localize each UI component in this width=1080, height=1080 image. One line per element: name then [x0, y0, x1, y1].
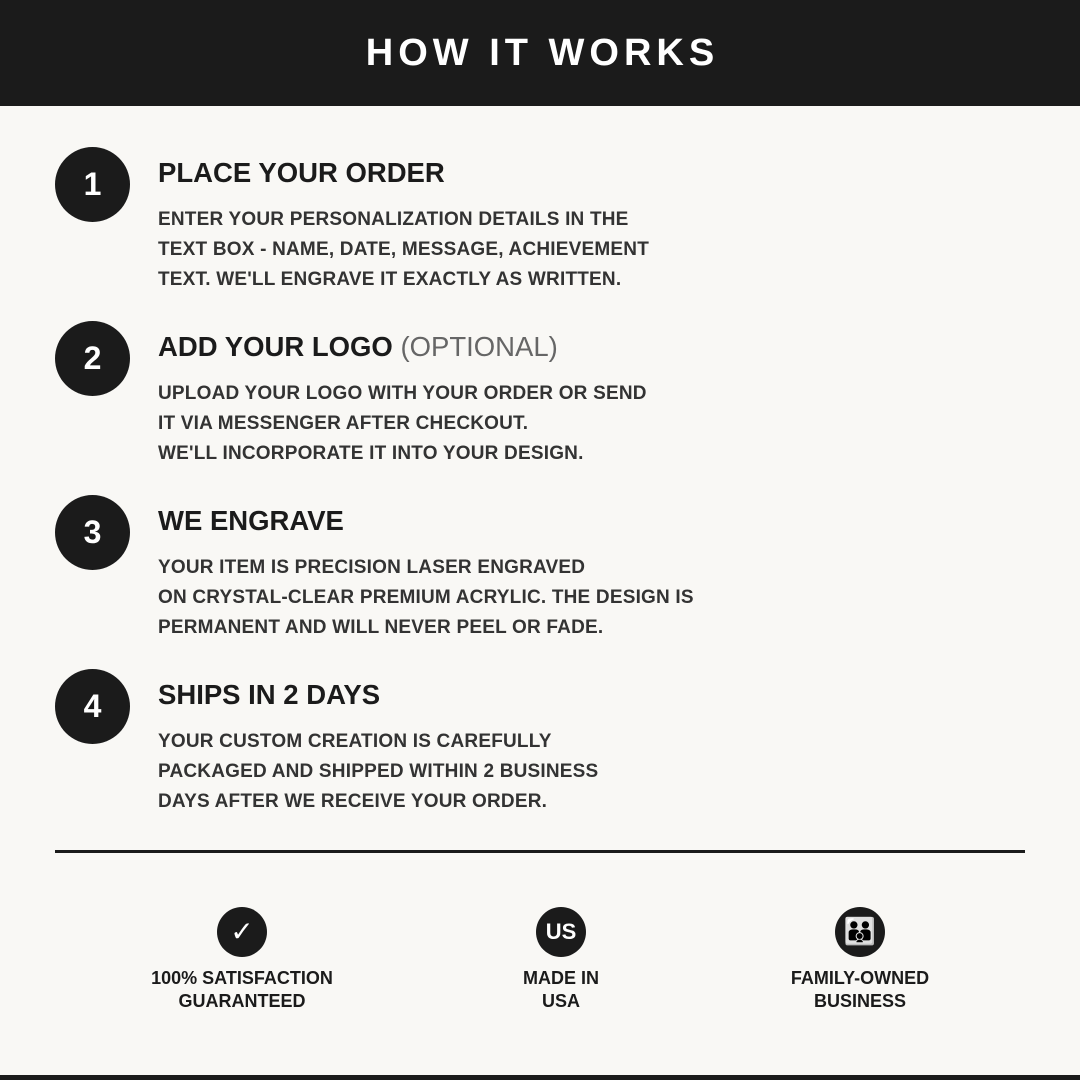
step 1 [55, 147, 649, 290]
title [0, 0, 1080, 106]
text: step 4 body [158, 731, 598, 812]
icon: number 1: 1 [84, 166, 101, 202]
text: step 1 body [158, 209, 649, 290]
icon: US: US [546, 919, 576, 944]
icon: number 1 [55, 147, 130, 222]
label: made in usa: MADE IN [523, 968, 599, 988]
text: step 2 body: WE'LL INCORPORATE IT INTO YOUR DESIGN. [158, 443, 584, 464]
icon: US [536, 907, 586, 957]
icon: check [217, 907, 267, 957]
badge: satisfaction [151, 907, 333, 1011]
label: made in usa: USA [542, 991, 580, 1011]
badge: made in usa [523, 907, 599, 1011]
text: step 4 body: PACKAGED AND SHIPPED WITHIN 2 BUSINESS [158, 761, 598, 782]
text: step 2 body: UPLOAD YOUR LOGO WITH YOUR ORDER OR SEND [158, 383, 647, 404]
text: step 3 body: PERMANENT AND WILL NEVER PEEL OR FADE. [158, 617, 603, 638]
label: satisfaction: 100% SATISFACTION [151, 968, 333, 988]
label: family owned [791, 968, 929, 1011]
label: satisfaction: GUARANTEED [178, 991, 306, 1011]
text: step 3 body: ON CRYSTAL-CLEAR PREMIUM ACRYLIC. THE DESIGN IS [158, 587, 694, 608]
icon: number 3: 3 [84, 514, 101, 550]
heading: ships in 2 days: SHIPS IN 2 DAYS [158, 679, 380, 710]
label: family owned: BUSINESS [814, 991, 906, 1011]
step 4 [55, 669, 598, 812]
label: made in usa [523, 968, 599, 1011]
icon: check: ✓ [230, 916, 254, 947]
step 2 [55, 321, 647, 464]
label: family owned: FAMILY-OWNED [791, 968, 929, 988]
text: step 1 body: TEXT BOX - NAME, DATE, MESSAGE, ACHIEVEMENT [158, 239, 649, 260]
icon: family: 👪 [844, 917, 876, 947]
icon: family [835, 907, 885, 957]
text: step 2 body: IT VIA MESSENGER AFTER CHECKOUT. [158, 413, 528, 434]
label: satisfaction [151, 968, 333, 1011]
title: HOW IT WORKS [366, 32, 719, 74]
text: step 3 body [158, 557, 694, 638]
text: step 3 body: YOUR ITEM IS PRECISION LASER ENGRAVED [158, 557, 585, 578]
text: step 4 body: YOUR CUSTOM CREATION IS CAREFULLY [158, 731, 552, 752]
icon: number 4 [55, 669, 130, 744]
icon: number 3 [55, 495, 130, 570]
badge: family owned [791, 907, 929, 1011]
heading: place your order: PLACE YOUR ORDER [158, 157, 445, 188]
text: step 4 body: DAYS AFTER WE RECEIVE YOUR ORDER. [158, 791, 547, 812]
text: step 2 body [158, 383, 647, 464]
icon: number 4: 4 [84, 688, 101, 724]
heading: add your logo: ADD YOUR LOGO (OPTIONAL) [158, 331, 558, 362]
heading: we engrave: WE ENGRAVE [158, 505, 344, 536]
text: step 1 body: ENTER YOUR PERSONALIZATION DETAILS IN THE [158, 209, 629, 230]
icon: number 2: 2 [84, 340, 101, 376]
step 3 [55, 495, 694, 638]
icon: number 2 [55, 321, 130, 396]
text: step 1 body: TEXT. WE'LL ENGRAVE IT EXACTLY AS WRITTEN. [158, 269, 621, 290]
